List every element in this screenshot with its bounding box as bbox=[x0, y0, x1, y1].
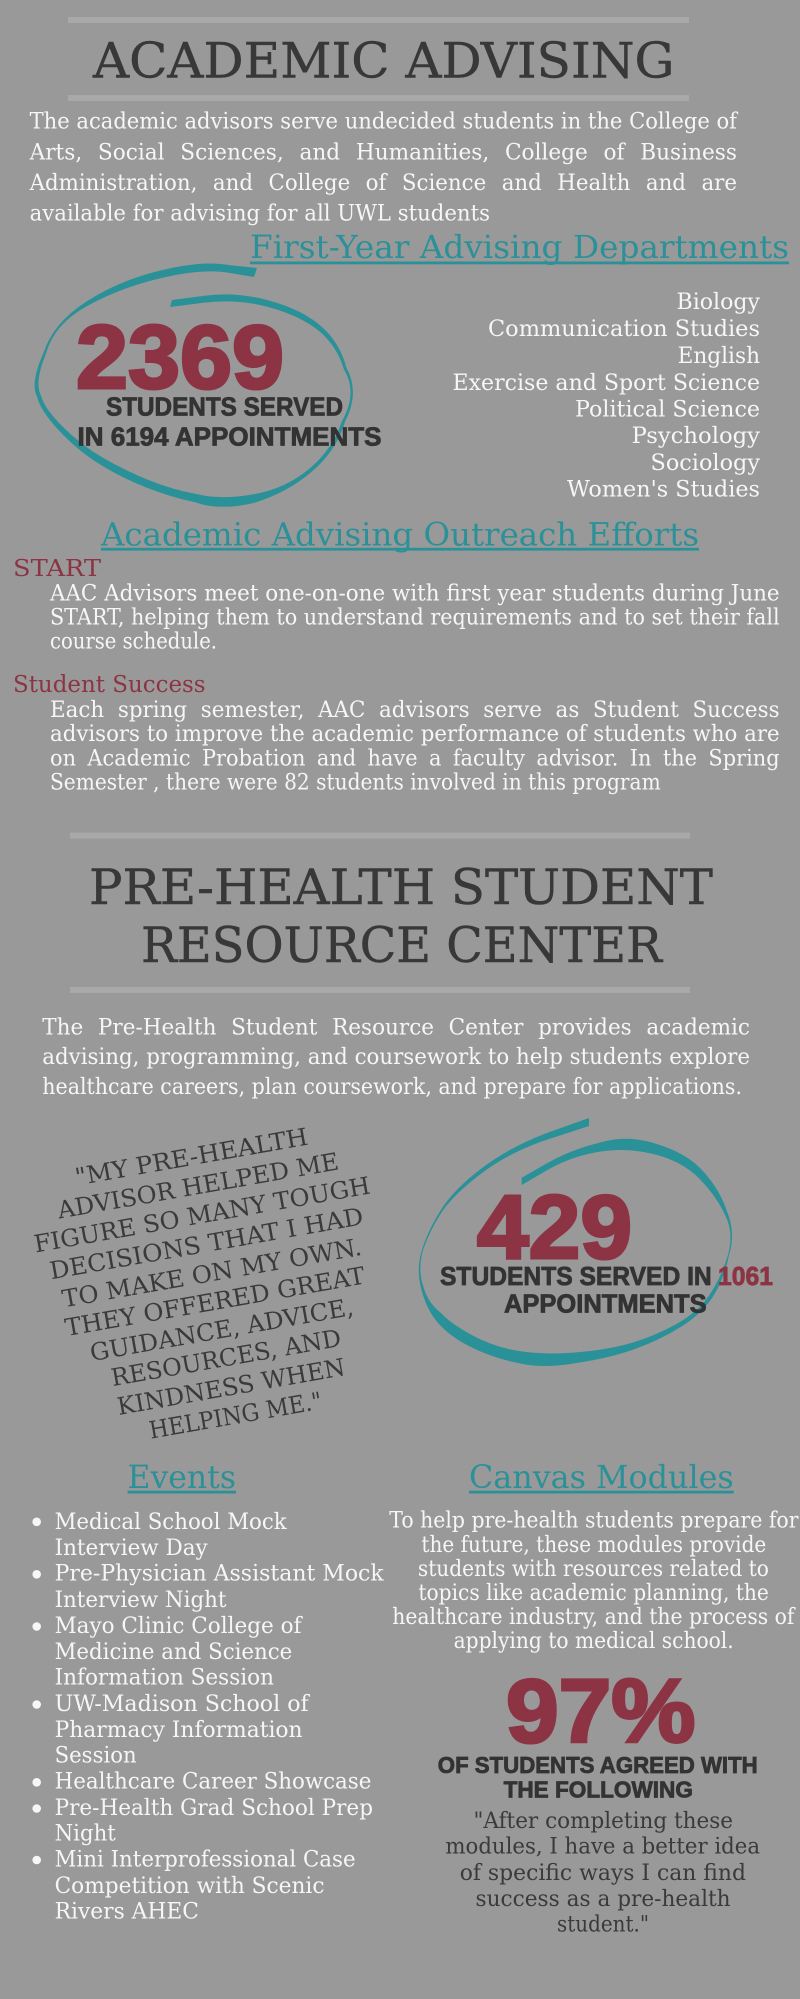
text: START description: AAC Advisors meet one-on-one with first year students during June bbox=[49, 581, 780, 606]
intro paragraph: Administration, and College of Science and Health and are bbox=[29, 171, 737, 196]
caption: STUDENTS SERVED IN bbox=[440, 1261, 712, 1291]
text: Student Success description: Semester , there were 82 students involved in this program bbox=[50, 770, 661, 795]
icon: teal hand-drawn circle bbox=[35, 263, 353, 507]
list: departments: English bbox=[678, 344, 760, 369]
caption bbox=[440, 1261, 773, 1319]
list: departments: Political Science bbox=[575, 398, 760, 423]
list: events: Night bbox=[55, 1821, 116, 1846]
student quote, rotated: DECISIONS THAT I HAD bbox=[47, 1202, 365, 1285]
student quote: modules: success as a pre-health bbox=[476, 1887, 731, 1912]
title: Academic Advising: ACADEMIC ADVISING bbox=[92, 33, 674, 90]
text: Student Success description: on Academic Probation and have a faculty advisor. In the Spring bbox=[50, 746, 780, 771]
label: START: START bbox=[13, 556, 102, 582]
stat: 429 students served bbox=[419, 1118, 773, 1366]
list: events: Information Session bbox=[55, 1666, 274, 1691]
list: events: Mayo Clinic College of bbox=[55, 1614, 303, 1639]
student quote, rotated: HELPING ME." bbox=[147, 1387, 324, 1445]
text: Canvas Modules description: the future, these modules provide bbox=[421, 1533, 766, 1558]
text: Student Success description: advisors to improve the academic performance of students who are bbox=[50, 722, 780, 747]
pre-health intro paragraph: advising, programming, and coursework to help students explore bbox=[42, 1045, 750, 1070]
list: departments: Communication Studies bbox=[488, 317, 760, 342]
text: Student Success description bbox=[50, 698, 780, 795]
list: events: Medical School Mock bbox=[55, 1510, 287, 1535]
student quote, rotated: TO MAKE ON MY OWN. bbox=[60, 1233, 364, 1313]
list: departments bbox=[452, 290, 761, 503]
caption: 1061 bbox=[718, 1261, 773, 1291]
text: Student Success description: Each spring semester, AAC advisors serve as Student Success bbox=[50, 698, 780, 723]
list: events: Mini Interprofessional Case bbox=[55, 1848, 356, 1873]
list: departments: Exercise and Sport Science bbox=[452, 371, 760, 396]
caption: STUDENTS SERVED bbox=[106, 392, 343, 422]
stat: 97% of students agreed bbox=[438, 1662, 758, 1803]
text: START description: course schedule. bbox=[50, 630, 217, 654]
text: Canvas Modules description: topics like academic planning, the bbox=[418, 1581, 769, 1606]
heading: First-Year Advising Departments: First-Year Advising Departments bbox=[250, 228, 789, 266]
list: events: Competition with Scenic bbox=[55, 1874, 324, 1899]
list: events bbox=[32, 1510, 384, 1924]
student quote, rotated: THEY OFFERED GREAT bbox=[63, 1262, 367, 1342]
number 97%: 97% bbox=[506, 1662, 696, 1762]
list: events: Pre-Health Grad School Prep bbox=[55, 1796, 373, 1821]
list: events: Interview Night bbox=[55, 1588, 227, 1613]
pre-health intro paragraph bbox=[42, 1015, 750, 1100]
student quote: modules: modules, I have a better idea bbox=[445, 1835, 760, 1860]
list: events: Medicine and Science bbox=[55, 1640, 292, 1665]
student quote: modules: of specific ways I can find bbox=[460, 1861, 746, 1886]
caption bbox=[78, 392, 382, 451]
caption: OF STUDENTS AGREED WITH bbox=[438, 1752, 758, 1778]
student quote: modules bbox=[445, 1809, 760, 1937]
number 429: 429 bbox=[477, 1178, 632, 1278]
list: departments: Sociology bbox=[650, 451, 761, 476]
student quote, rotated: RESOURCES, AND bbox=[109, 1324, 343, 1392]
number 2369: 2369 bbox=[76, 308, 284, 408]
student quote, rotated: GUIDANCE, ADVICE, bbox=[88, 1293, 356, 1367]
title: Pre-Health Student Resource Center: RESOURCE CENTER bbox=[141, 917, 664, 974]
student quote: modules: student." bbox=[557, 1912, 649, 1937]
intro paragraph bbox=[29, 110, 739, 227]
pre-health intro paragraph: The Pre-Health Student Resource Center provides academic bbox=[42, 1015, 750, 1040]
caption bbox=[438, 1752, 758, 1803]
text: Canvas Modules description: students with resources related to bbox=[418, 1557, 769, 1582]
list: departments: Biology bbox=[676, 290, 761, 315]
text: Canvas Modules description bbox=[389, 1509, 799, 1654]
student quote: modules: "After completing these bbox=[474, 1809, 733, 1834]
title: Pre-Health Student Resource Center bbox=[70, 833, 713, 993]
student quote, rotated: ADVISOR HELPED ME bbox=[54, 1148, 341, 1225]
text: START description bbox=[49, 581, 780, 654]
list: events: Pharmacy Information bbox=[55, 1718, 303, 1743]
intro paragraph: The academic advisors serve undecided students in the College of bbox=[30, 110, 739, 135]
list: events: Interview Day bbox=[55, 1536, 208, 1561]
intro paragraph: available for advising for all UWL students bbox=[30, 202, 490, 227]
student quote, rotated bbox=[32, 1123, 372, 1445]
heading: Academic Advising Outreach Efforts: Academic Advising Outreach Efforts bbox=[100, 516, 699, 554]
text: Canvas Modules description: applying to medical school. bbox=[454, 1629, 734, 1654]
heading: Canvas Modules: Canvas Modules bbox=[469, 1458, 734, 1496]
student quote, rotated: FIGURE SO MANY TOUGH bbox=[32, 1172, 372, 1258]
caption: APPOINTMENTS bbox=[504, 1289, 707, 1319]
student quote, rotated: KINDNESS WHEN bbox=[115, 1353, 347, 1421]
stat: 2369 students served bbox=[35, 263, 382, 507]
list: departments: Psychology bbox=[632, 424, 761, 449]
list: departments: Women's Studies bbox=[567, 478, 760, 503]
title: Pre-Health Student Resource Center: PRE-HEALTH STUDENT bbox=[89, 859, 713, 916]
icon: teal hand-drawn circle bbox=[419, 1118, 732, 1366]
list: events: Pre-Physician Assistant Mock bbox=[55, 1562, 384, 1587]
list: events: UW-Madison School of bbox=[55, 1692, 311, 1717]
list: events: Session bbox=[55, 1744, 137, 1769]
title: Academic Advising bbox=[68, 17, 689, 101]
list: events: Rivers AHEC bbox=[55, 1900, 199, 1924]
label: Student Success: Student Success bbox=[13, 672, 206, 698]
list: events: Healthcare Career Showcase bbox=[55, 1770, 371, 1795]
heading: Events: Events bbox=[128, 1458, 236, 1496]
student quote, rotated: "MY PRE-HEALTH bbox=[73, 1123, 310, 1191]
caption: THE FOLLOWING bbox=[504, 1777, 693, 1803]
pre-health intro paragraph: healthcare careers, plan coursework, and prepare for applications. bbox=[42, 1075, 742, 1100]
caption: IN 6194 APPOINTMENTS bbox=[78, 421, 382, 451]
intro paragraph: Arts, Social Sciences, and Humanities, College of Business bbox=[29, 140, 737, 165]
